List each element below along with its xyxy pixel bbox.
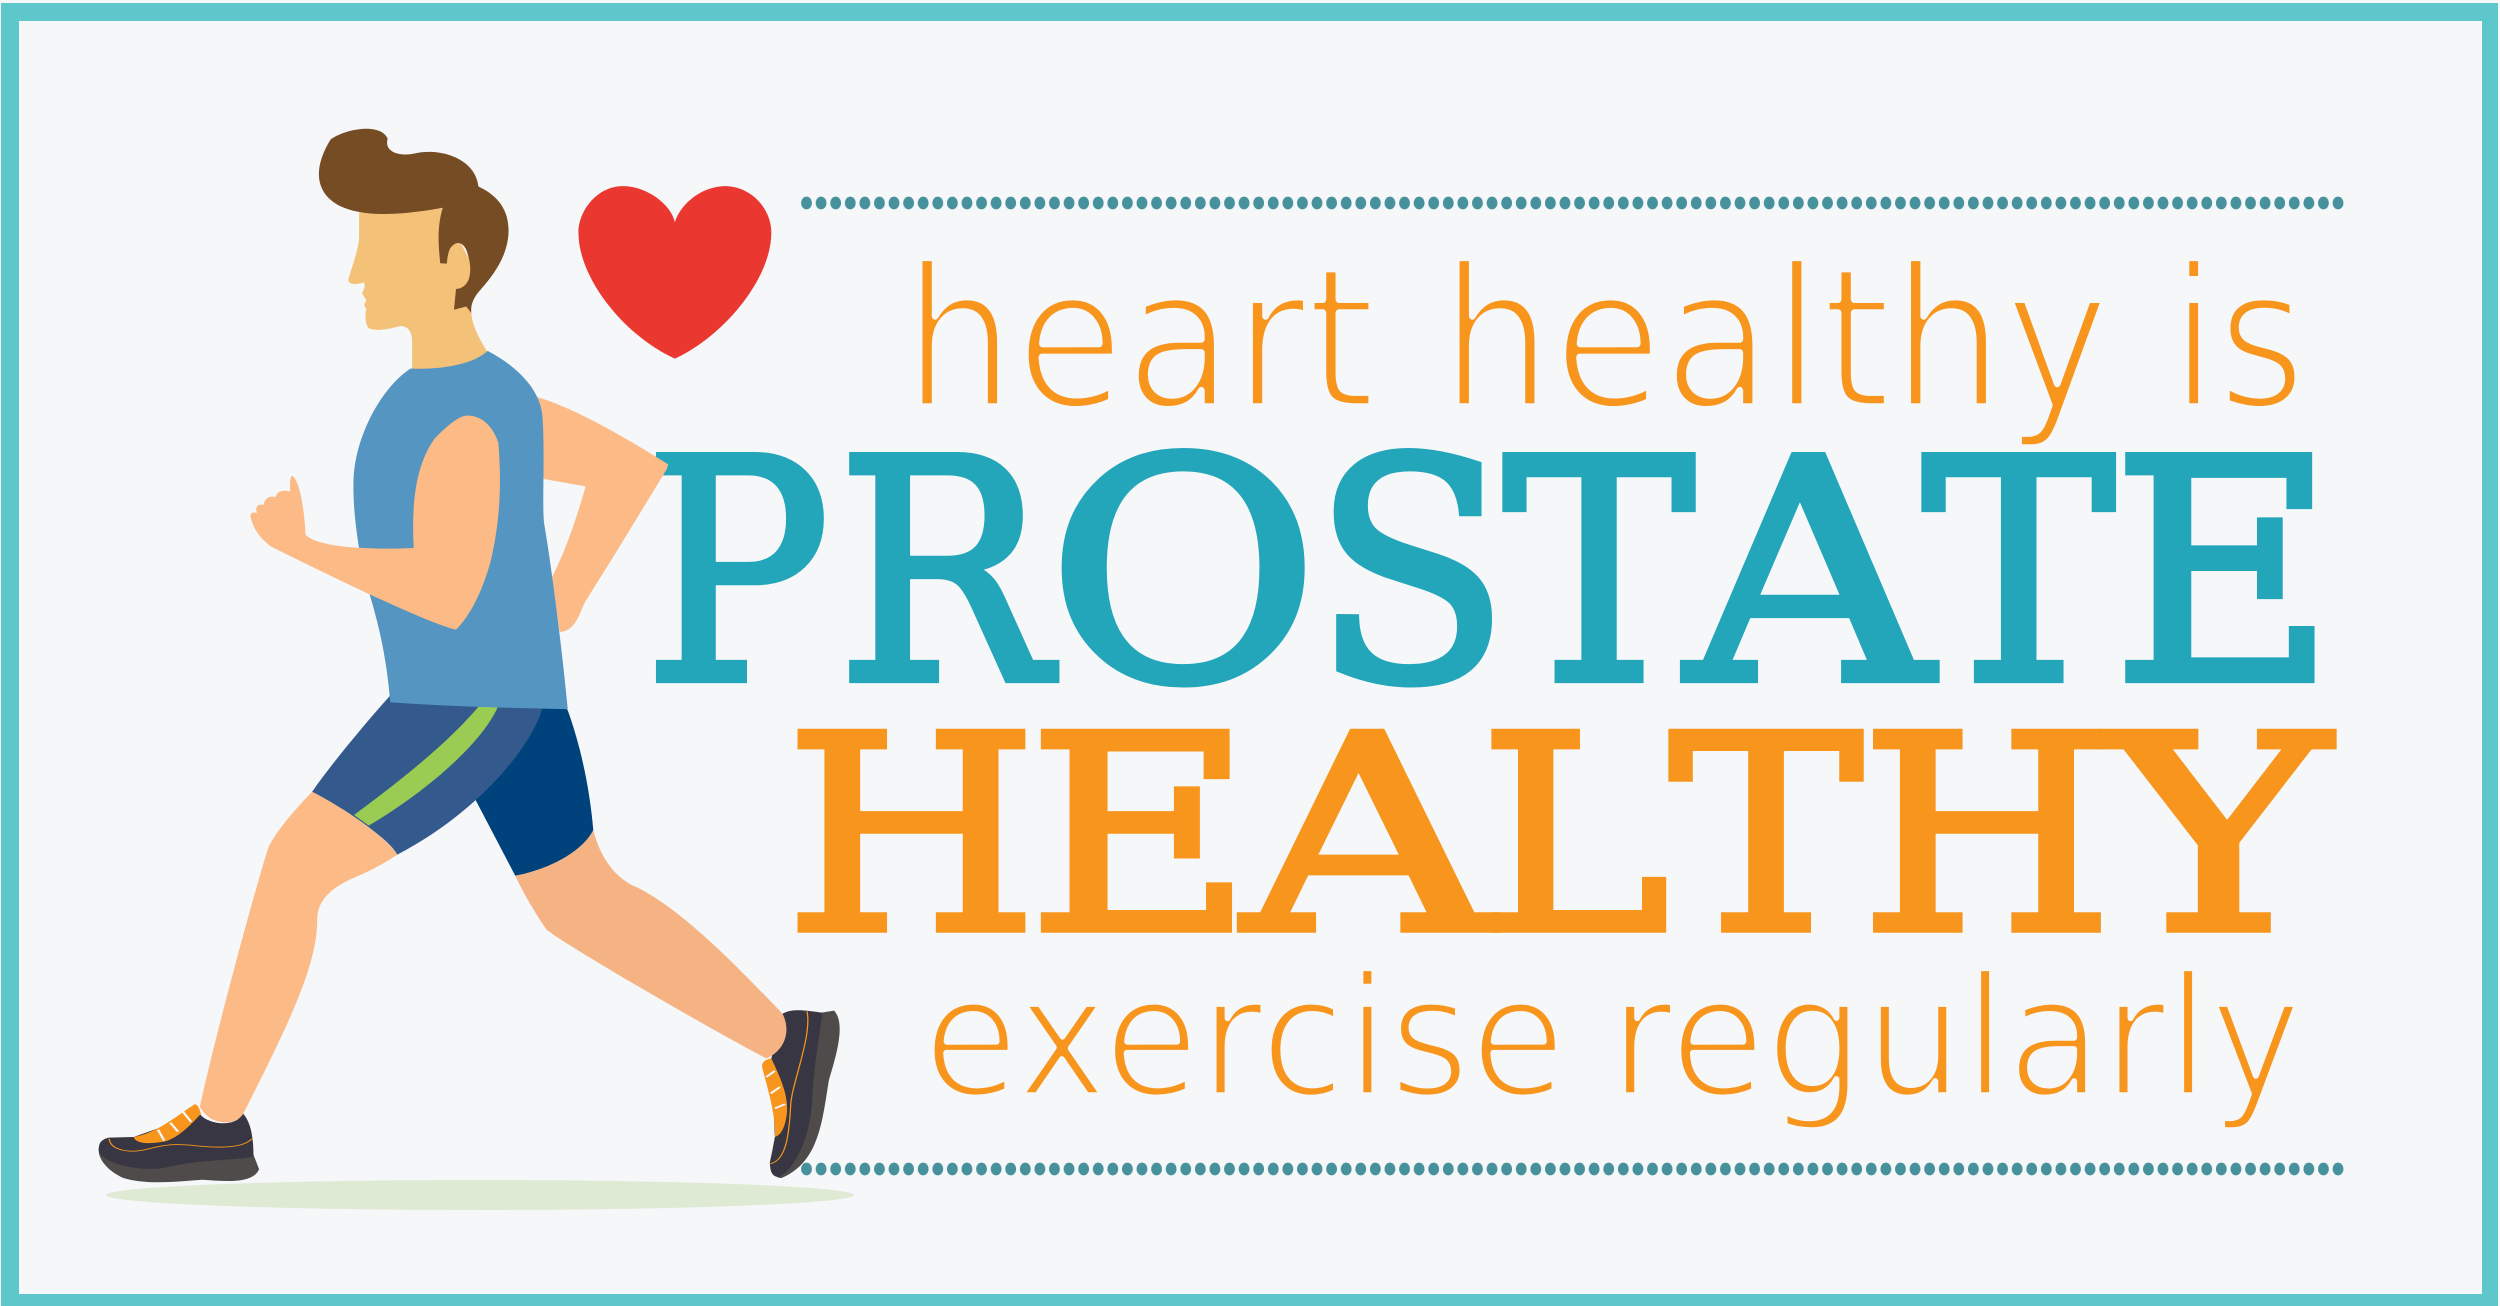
heading line: heart healthy is [903,225,2306,454]
rear shoe [762,1010,840,1178]
heading: PROSTATE: A [1681,395,1936,752]
heading: PROSTATE: P [644,395,830,752]
runner figure [99,129,840,1182]
front arm [250,416,500,630]
icon: heart [578,186,771,359]
tank top [353,351,568,709]
shorts rear [475,694,593,876]
hair [319,129,509,313]
ground shadow [106,1180,854,1210]
rear leg [515,830,786,1058]
back arm [537,397,668,632]
heading: HEALTHY: L [1479,678,1670,994]
heading: PROSTATE: T [1922,396,2117,752]
heading line: heart healthy is: healthy [1440,225,2110,454]
heading: PROSTATE: R [837,394,1057,752]
head and neck [348,208,488,382]
heading: PROSTATE: O [1047,395,1319,752]
heading line: heart healthy is: heart [903,225,1376,454]
dotted rule top [799,195,2345,211]
shorts stripe [354,698,501,826]
heading: HEALTHY: Y [2101,679,2334,994]
heading: PROSTATE: E [2112,395,2335,753]
heading: HEALTHY: H [785,678,1038,994]
heading: HEALTHY [785,678,2334,994]
dotted rule bottom [799,1161,2345,1177]
heading line: exercise regularly: exercise [923,940,1566,1136]
heading line: exercise regularly: regularly [1609,940,2302,1136]
front leg [200,792,397,1122]
heading: HEALTHY: A [1238,679,1497,994]
heading: PROSTATE: T [1503,396,1696,753]
heading: HEALTHY: E [1028,678,1253,994]
heading: HEALTHY: T [1669,679,1865,994]
heading line: exercise regularly [923,940,2302,1136]
heading line: heart healthy is: is [2170,225,2306,454]
front shoe [99,1104,259,1182]
heading: PROSTATE [644,394,2335,753]
heading: HEALTHY: H [1860,678,2113,994]
heading: PROSTATE: S [1313,395,1510,753]
shorts front [312,687,544,855]
